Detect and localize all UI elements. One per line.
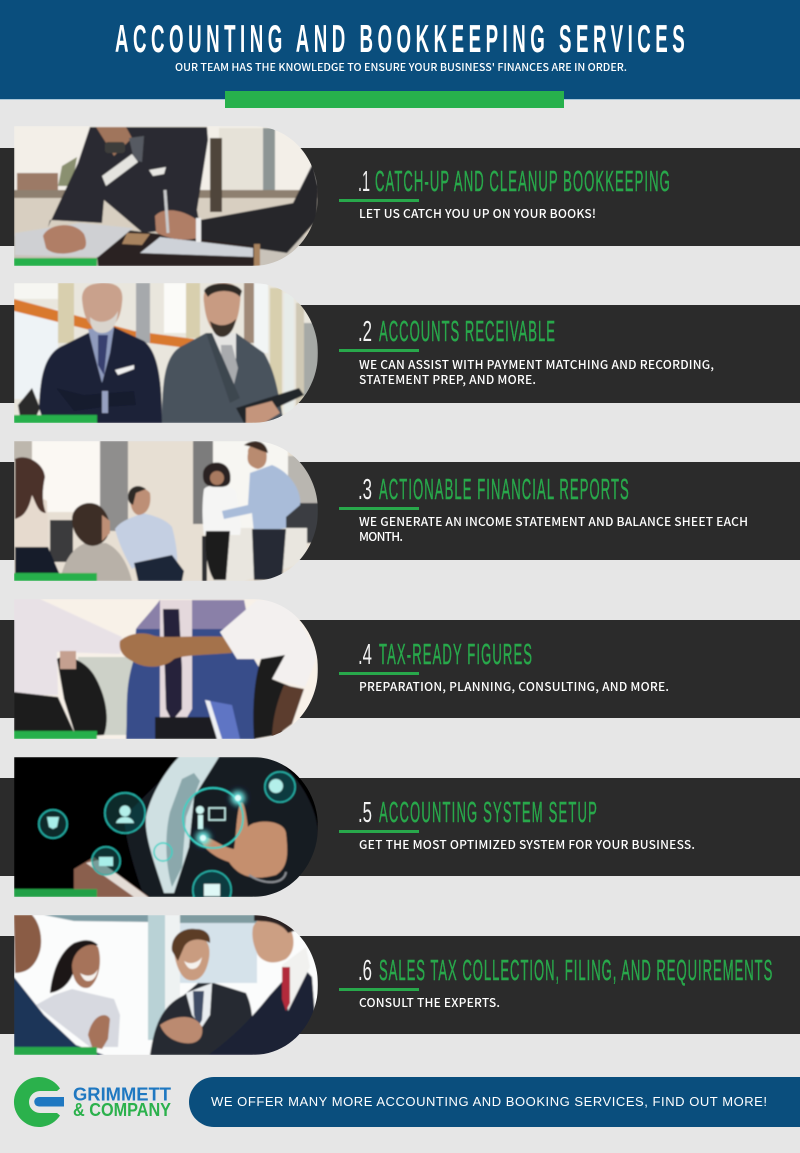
number 3: .3: [358, 474, 372, 506]
description 2: WE CAN ASSIST WITH PAYMENT MATCHING AND RECORDING,: [359, 356, 714, 373]
underline 4: [339, 672, 419, 675]
heading 1: CATCH-UP AND CLEANUP BOOKKEEPING: [375, 165, 670, 197]
panel: service 2: [0, 283, 800, 423]
photo: team meeting in an office: [14, 441, 318, 581]
description 3: WE GENERATE AN INCOME STATEMENT AND BALANCE SHEET EACH: [359, 513, 748, 530]
description 5: GET THE MOST OPTIMIZED SYSTEM FOR YOUR BUSINESS.: [359, 836, 695, 853]
number 6: .6: [358, 955, 372, 987]
underline 6: [339, 988, 419, 991]
panel: service 3: [0, 441, 800, 581]
number 5: .5: [358, 797, 372, 829]
photo: two businessmen: [14, 283, 318, 423]
panel: service 1: .1: [358, 166, 370, 198]
heading 4: TAX-READY FIGURES: [379, 638, 532, 670]
logo wordmark: GRIMMETT: [73, 1084, 171, 1104]
panel: service 5: [0, 757, 800, 909]
photo: business people signing documents: [14, 126, 318, 266]
description 4: PREPARATION, PLANNING, CONSULTING, AND MORE.: [359, 678, 669, 695]
underline 5: [339, 830, 419, 833]
panel: service 4: [0, 599, 800, 739]
description 2: STATEMENT PREP, AND MORE.: [359, 371, 536, 388]
callout: footer pill: [189, 1077, 800, 1127]
heading 3: ACTIONABLE FINANCIAL REPORTS: [379, 473, 629, 505]
description 6: CONSULT THE EXPERTS.: [359, 994, 500, 1011]
description 3: MONTH.: [359, 528, 403, 545]
underline 1: [339, 199, 419, 202]
callout: footer pill: WE OFFER MANY MORE ACCOUNTING AND BOOKING SERVICES, FIND OUT MORE!: [211, 1094, 767, 1109]
description 3: [359, 513, 748, 545]
underline 2: [339, 349, 419, 352]
panel: service 6: [0, 915, 800, 1055]
green header bar: [225, 91, 564, 108]
header banner: [0, 0, 800, 100]
description 1: LET US CATCH YOU UP ON YOUR BOOKS!: [359, 205, 596, 222]
heading 5: ACCOUNTING SYSTEM SETUP: [379, 796, 597, 828]
logo: Grimmett & Company: [14, 1077, 171, 1127]
heading 6: SALES TAX COLLECTION, FILING, AND REQUIREMENTS: [379, 954, 772, 986]
photo: business handshake: [14, 599, 318, 739]
panel: service 1: [0, 126, 800, 266]
photo: smiling colleagues applauding: [14, 915, 318, 1055]
icon: green C mark: [14, 1077, 64, 1127]
description 2: [359, 356, 714, 388]
photo: businessman touching glowing icons: [14, 757, 318, 909]
logo: Grimmett & Company: & COMPANY: [73, 1100, 171, 1120]
heading 2: ACCOUNTS RECEIVABLE: [379, 315, 555, 347]
number 2: .2: [358, 316, 372, 348]
title: ACCOUNTING AND BOOKKEEPING SERVICES: [115, 18, 685, 61]
underline 3: [339, 507, 419, 510]
number 4: .4: [358, 639, 372, 671]
subtitle: OUR TEAM HAS THE KNOWLEDGE TO ENSURE YOUR BUSINESS' FINANCES ARE IN ORDER.: [175, 60, 627, 75]
